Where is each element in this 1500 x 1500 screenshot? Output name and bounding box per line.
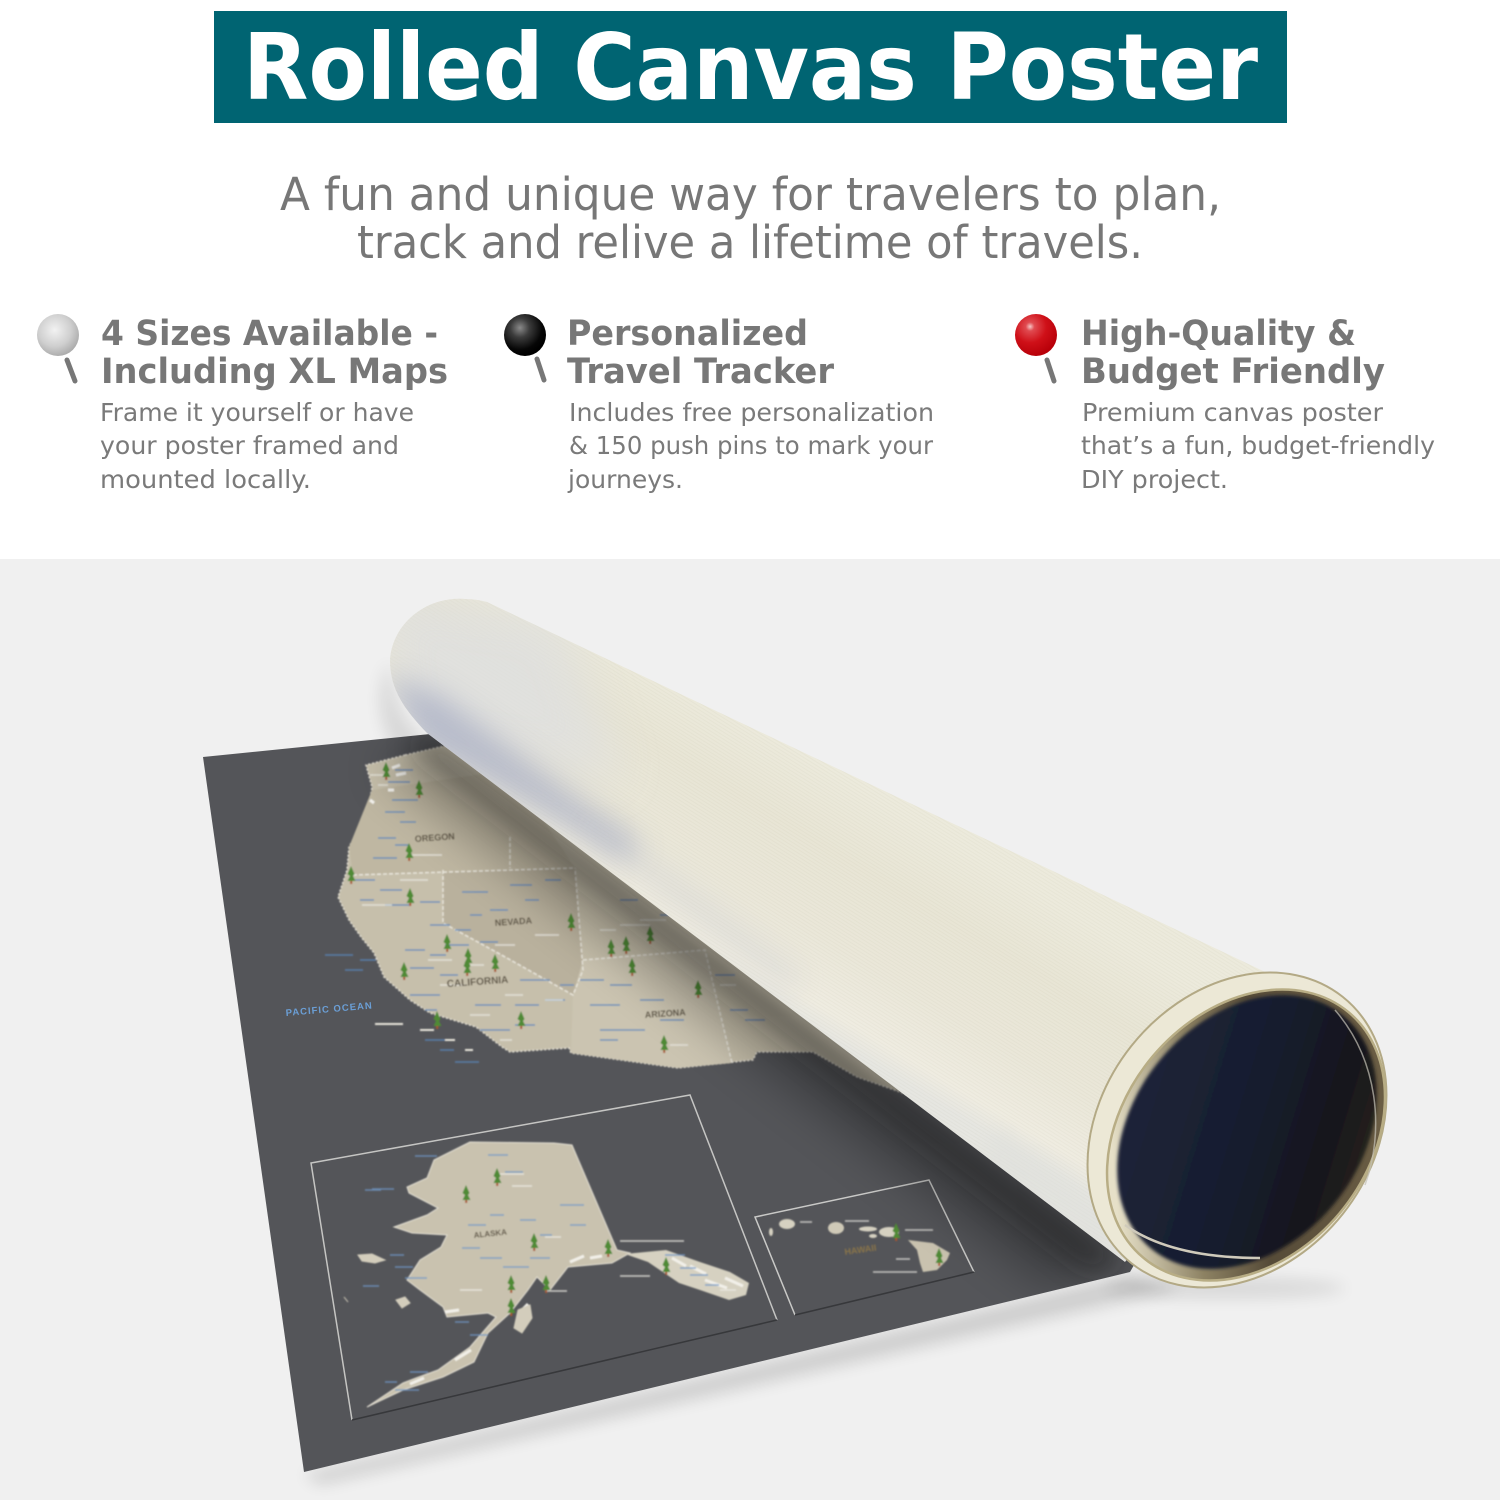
heading: quality: Budget Friendly: [1081, 352, 1385, 392]
text: quality description: that’s a fun, budget-friendly: [1081, 431, 1435, 460]
poster sheet: [203, 730, 1200, 1472]
canvas roll: [390, 598, 1388, 1288]
Alaska labels: blue: [363, 1155, 719, 1390]
text: quality description: [1081, 398, 1435, 494]
text: tracker description: [567, 398, 934, 494]
state: Oregon and Washington shading: [349, 770, 575, 875]
state names: ARIZONA: [644, 1007, 687, 1020]
islands off California: [375, 1024, 473, 1050]
text: quality description: Premium canvas poster: [1082, 398, 1384, 427]
map: Alaska: [344, 1142, 749, 1407]
heading: quality: High-Quality &: [1081, 314, 1356, 354]
map: Hawaii: [769, 1219, 950, 1272]
white coastline flecks: [410, 1256, 743, 1384]
subtitle: A fun and unique way for travelers to plan,: [280, 168, 1221, 221]
page background: lower grey panel: [0, 559, 1500, 1500]
text: sizes description: mounted locally.: [100, 465, 311, 494]
state: Nevada: [443, 868, 583, 995]
roll end: dark interior: [1064, 944, 1430, 1320]
text: tracker description: journeys.: [567, 465, 683, 494]
icon: black push pin: [504, 314, 546, 380]
state names: CALIFORNIA: [446, 975, 509, 990]
roll end: outer wrap: [1026, 913, 1448, 1347]
feature: travel tracker: [504, 314, 934, 494]
inset frame: Hawaii: [755, 1180, 974, 1315]
inset frame: Alaska: [311, 1095, 777, 1420]
state borders: [353, 837, 732, 1063]
map labels: blue place names: [325, 770, 765, 1062]
state: Arizona shading: [571, 950, 732, 1068]
heading: travel tracker: Travel Tracker: [567, 352, 835, 392]
state names: OREGON: [414, 831, 455, 844]
state name: Alaska: ALASKA: [473, 1228, 508, 1240]
text: sizes description: your poster framed and: [100, 431, 399, 460]
icon: silver push pin: [37, 314, 79, 381]
Alaska trees: [462, 1168, 670, 1316]
text: sizes description: [100, 398, 414, 494]
heading: sizes: Including XL Maps: [101, 352, 448, 392]
text: sizes description: Frame it yourself or have: [100, 398, 414, 427]
subtitle: track and relive a lifetime of travels.: [357, 216, 1143, 269]
map: contiguous western US: [325, 740, 1000, 1120]
roll end: rim highlight: [1335, 1010, 1376, 1185]
subtitle: [280, 168, 1221, 269]
heading: travel tracker: Personalized: [567, 314, 808, 354]
ocean label: PACIFIC OCEAN: [285, 1000, 373, 1019]
white coast flecks near Puget Sound: [370, 765, 406, 803]
roll shadow on poster: [380, 733, 1125, 1290]
roll shading: grey left end and bluish underside: [380, 590, 1130, 1280]
ground shadows: [304, 660, 1345, 1484]
text: tracker description: & 150 push pins to mark your: [569, 431, 934, 460]
trees: [348, 762, 702, 1053]
islands: [344, 1254, 532, 1333]
feature: quality: [1015, 314, 1435, 494]
Alaska labels: white: [460, 1174, 736, 1291]
feature: sizes: [37, 314, 448, 494]
heading: travel tracker: [567, 314, 835, 392]
text: tracker description: Includes free personalization: [569, 398, 934, 427]
heading: sizes: 4 Sizes Available -: [101, 314, 438, 354]
state names: NEVADA: [494, 915, 533, 928]
Alaska panhandle: [625, 1250, 749, 1300]
heading: sizes: [101, 314, 448, 392]
roll end: inner wrap: [1050, 934, 1442, 1336]
map: Hawaii: HAWAII: [844, 1243, 877, 1257]
map labels: white city names: [362, 775, 736, 1045]
text: quality description: DIY project.: [1081, 465, 1228, 494]
heading: quality: [1081, 314, 1385, 392]
title banner: Rolled Canvas Poster: [243, 14, 1259, 121]
icon: red push pin: [1015, 314, 1057, 381]
state names: [414, 831, 687, 1020]
roll end: curled inner edge: [1125, 1225, 1260, 1258]
